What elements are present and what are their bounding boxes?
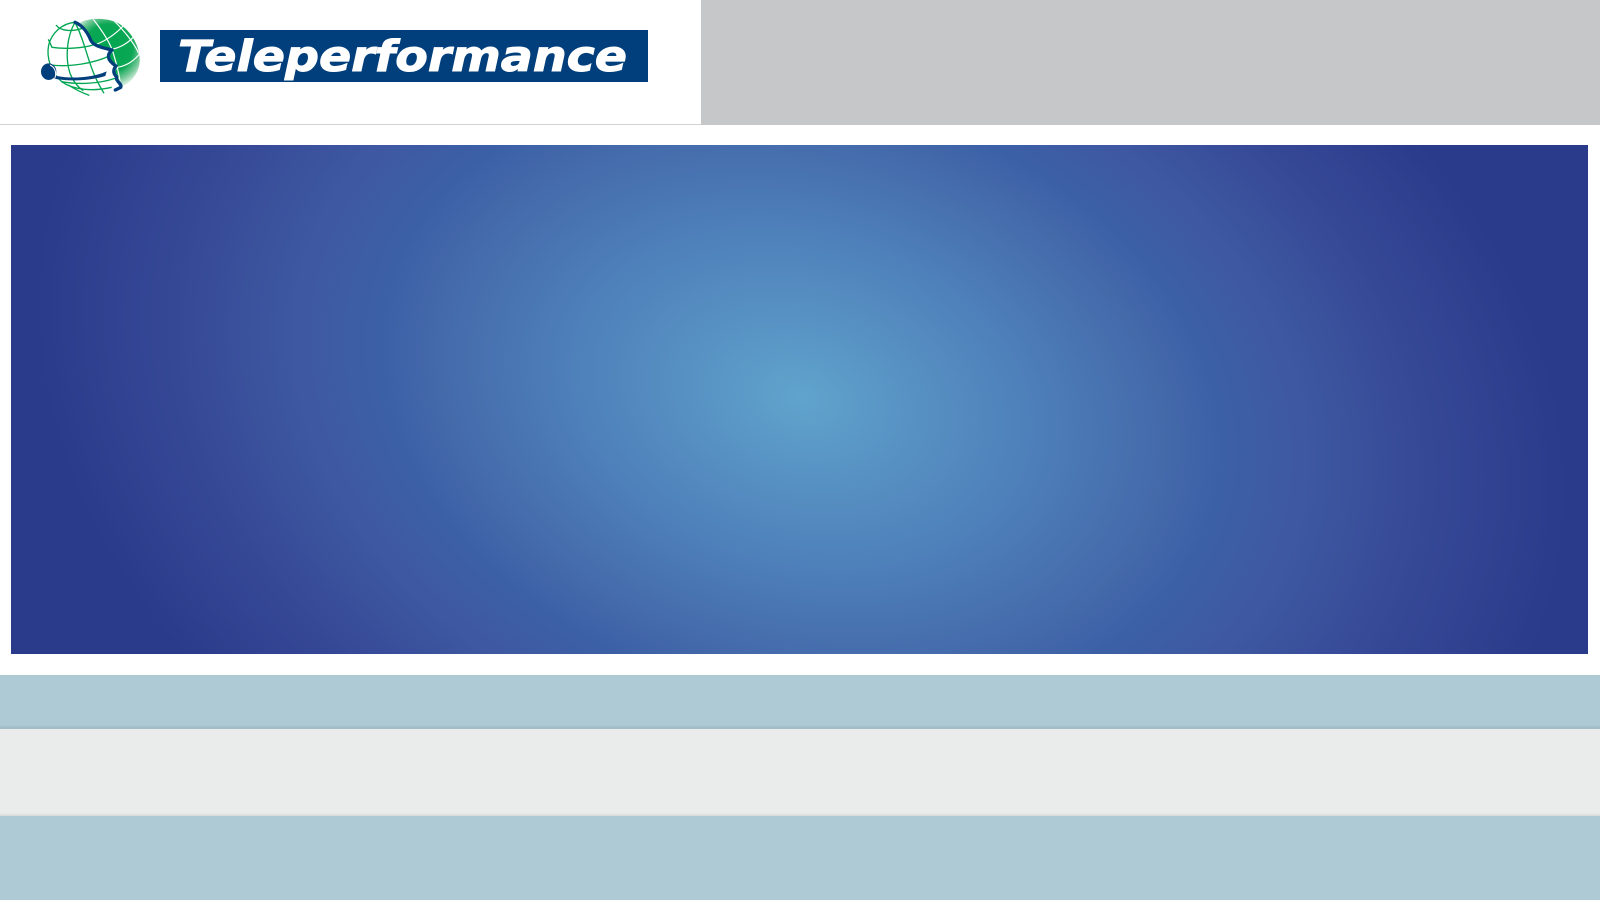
wordmark banner: Teleperformance (178, 32, 627, 82)
top blue band (0, 675, 1600, 729)
header logo panel (0, 0, 701, 125)
light grey band (0, 729, 1600, 816)
header grey panel (701, 0, 1600, 125)
main gradient panel (11, 145, 1588, 654)
icon: globe with headset (41, 18, 140, 96)
bottom blue band (0, 816, 1600, 900)
